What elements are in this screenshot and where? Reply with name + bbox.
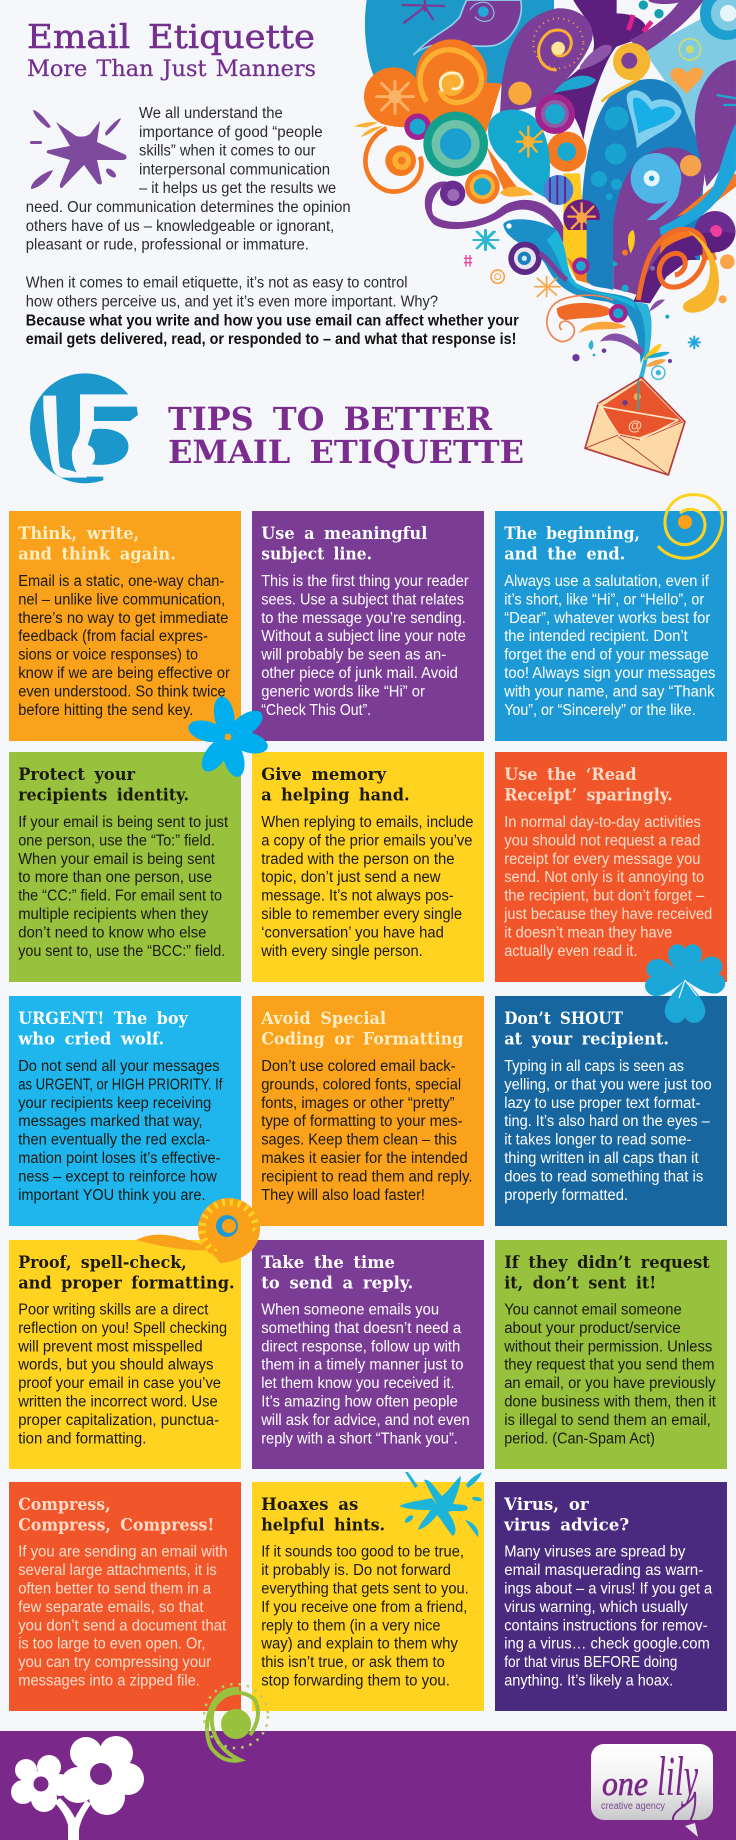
body: hoaxes: everything that gets sent to you. [261, 1580, 469, 1598]
tip card 7: urgent: who cried wolf. [17, 1029, 164, 1048]
body: hoaxes: this isn’t true, or ask them to [261, 1654, 445, 1671]
subtitle: More Than Just Manners [27, 57, 316, 82]
body: take the time: It’s amazing how often people [261, 1394, 458, 1410]
title: Email Etiquette [27, 17, 315, 56]
logo: one lily creative agency: creative agency [601, 1801, 665, 1812]
tip card 6: read receipt: Receipt’ sparingly. [504, 785, 673, 804]
body: compress: messages into a zipped file. [18, 1672, 200, 1690]
body: think, write [18, 573, 230, 719]
icon: purple splat [30, 110, 126, 189]
tip card 8: special formatting [252, 996, 484, 1226]
tip card 1: think, write: and think again. [18, 544, 176, 563]
tip card 9: don't shout [495, 996, 727, 1226]
body: don't shout: does to read something that is [504, 1168, 704, 1185]
body: think, write: nel – unlike live communication, [18, 591, 225, 608]
intro text: need. Our communication determines the opinion [26, 199, 351, 216]
intro text: email gets delivered, read, or responded to – and what that response is! [26, 331, 516, 348]
intro text: pleasant or rude, professional or immature. [26, 237, 309, 254]
body: proof: tion and formatting. [18, 1430, 146, 1447]
body: don't sent it: period. (Can-Spam Act) [504, 1430, 655, 1447]
body: recipients identity: multiple recipients when they [18, 906, 209, 923]
intro text: importance of good “people [139, 124, 323, 141]
icon: white tree with two flowers [11, 1736, 144, 1840]
body: urgent: as URGENT, or HIGH PRIORITY. If [18, 1076, 223, 1093]
tip card 10: proof: and proper formatting. [18, 1273, 235, 1292]
tip card 12: don't sent it: If they didn’t request [504, 1253, 710, 1272]
body: proof: proof your email in case you’ve [18, 1375, 221, 1392]
tip card 1: think, write [9, 511, 241, 741]
body: memory: sible to remember every single [261, 906, 462, 923]
body: proof: Poor writing skills are a direct [18, 1302, 209, 1318]
logo: one lily creative agency: one [602, 1766, 648, 1803]
body: don't sent it: an email, or you have previously [504, 1375, 716, 1392]
body: beginning and end: with your name, and say “Thank [503, 683, 715, 700]
body: take the time: reply with a short “Thank you”. [261, 1430, 458, 1447]
body: special formatting: makes it easier for the intended [261, 1150, 468, 1167]
body: urgent: mation point loses it’s effective- [18, 1150, 221, 1167]
tip card 15: virus: Virus, or [503, 1495, 589, 1514]
body: special formatting: grounds, colored fonts, special [261, 1076, 461, 1093]
illustration: colourful swirl burst [354, 0, 736, 475]
body: read receipt: actually even read it. [504, 943, 638, 960]
body: hoaxes: it probably is. Do not forward [261, 1562, 451, 1579]
body: recipients identity: If your email is being sent to just [18, 814, 229, 831]
tip card 4: recipients identity: recipients identity. [18, 785, 189, 804]
tip card 10: proof [9, 1240, 241, 1469]
body: don't shout [504, 1058, 712, 1204]
intro text [26, 105, 519, 348]
body: take the time [260, 1302, 470, 1447]
body: memory: traded with the person on the [261, 851, 455, 868]
tip card 6: read receipt [495, 752, 727, 982]
body: read receipt: receipt for every message you [504, 851, 700, 868]
icon: green spiral [204, 1684, 268, 1761]
body: subject line: This is the first thing your reader [261, 573, 469, 590]
body: read receipt: In normal day-to-day activities [504, 814, 701, 831]
body: special formatting: They will also load faster! [261, 1187, 425, 1204]
body: subject line: Without a subject line your note [261, 628, 466, 645]
body: memory: message. It’s not always pos- [261, 888, 454, 905]
body: memory: ‘conversation’ you have had [261, 924, 444, 941]
tip card 9: don't shout: Don’t SHOUT [504, 1009, 624, 1028]
body: compress: several large attachments, it is [18, 1562, 217, 1579]
body: recipients identity: to more than one person, use [18, 869, 212, 886]
body: don't sent it: You cannot email someone [504, 1302, 682, 1318]
body: think, write: even understood. So think twice [18, 683, 226, 700]
body: don't shout: thing written in all caps than it [504, 1150, 699, 1167]
intro text: how others perceive us, and yet it’s even more important. Why? [26, 294, 438, 310]
body: take the time: will ask for advice, and not even [260, 1412, 470, 1429]
body: beginning and end: Always use a salutation, even if [504, 573, 710, 590]
body: read receipt: send. Not only is it annoying to [504, 869, 704, 886]
body: virus: email masquerading as warn- [504, 1562, 703, 1579]
heading: 15 tips: TIPS TO BETTER [168, 400, 492, 438]
tip card 3: beginning and end: The beginning, [504, 524, 640, 543]
body: take the time: them in a timely manner just to [261, 1357, 464, 1374]
body: think, write: feedback (from facial expres- [18, 628, 208, 645]
body: memory [260, 814, 473, 960]
heading: 15 tips: EMAIL ETIQUETTE [168, 433, 524, 471]
body: virus [504, 1544, 713, 1690]
tip card 14: hoaxes: Hoaxes as [261, 1495, 358, 1514]
body: virus: Many viruses are spread by [504, 1544, 686, 1561]
body: special formatting: sages. Keep them clean – this [261, 1132, 457, 1149]
tip card 7: urgent: URGENT! The boy [18, 1009, 188, 1028]
body: don't shout: lazy to use proper text format- [504, 1095, 700, 1112]
body: beginning and end: too! Always sign your messages [504, 665, 716, 682]
tip card 12: don't sent it: it, don’t sent it! [504, 1273, 656, 1292]
tip card 7: urgent [9, 996, 241, 1226]
tip card 14: hoaxes: helpful hints. [261, 1515, 385, 1534]
tip card 13: compress: Compress, [18, 1495, 111, 1514]
body: think, write: Email is a static, one-way chan- [18, 573, 224, 590]
body: read receipt [503, 814, 712, 960]
body: urgent [18, 1058, 223, 1204]
body: urgent: important YOU think you are. [18, 1187, 206, 1204]
body: hoaxes: way) and explain to them why [260, 1636, 458, 1653]
tip card 15: virus: virus advice? [503, 1515, 629, 1534]
body: virus: contains instructions for remov- [504, 1617, 708, 1634]
body: urgent: then eventually the red excla- [18, 1132, 210, 1149]
body: compress: If you are sending an email with [18, 1544, 228, 1561]
body: don't shout: yelling, or that you were just too [504, 1076, 712, 1093]
icon: yellow spiral [658, 495, 722, 558]
tip card 10: proof: Proof, spell-check, [18, 1253, 187, 1272]
body: think, write: know if we are being effective or [18, 665, 230, 682]
body: hoaxes: If it sounds too good to be true, [261, 1544, 464, 1561]
tip card 4: recipients identity: Protect your [18, 765, 135, 784]
tip card 9: don't shout: at your recipient. [504, 1029, 669, 1048]
body: memory: When replying to emails, include [261, 814, 473, 831]
body: virus: ing a virus… check google.com [504, 1636, 710, 1653]
body: don't sent it: is illegal to send them an email, [504, 1412, 711, 1429]
body: virus: anything. It’s likely a hoax. [504, 1672, 673, 1690]
icon: orange shell spiral [136, 1198, 260, 1263]
body: think, write: before hitting the send key. [18, 702, 193, 719]
body: urgent: ness – except to reinforce how [18, 1168, 218, 1185]
body: proof: written the incorrect word. Use [17, 1394, 218, 1410]
body: hoaxes: If you receive one from a friend, [261, 1599, 467, 1616]
body: don't shout: Typing in all caps is seen as [504, 1058, 684, 1075]
tip card 3: beginning and end [495, 511, 727, 741]
body: proof: will prevent most misspelled [17, 1338, 203, 1355]
body: read receipt: it doesn’t mean they have [504, 924, 672, 941]
body: beginning and end [503, 573, 716, 719]
tip card 15: virus [495, 1482, 727, 1711]
body: subject line: to the message you’re sending. [261, 610, 466, 627]
heading: 15 tips [168, 400, 524, 471]
body: don't sent it: about your product/service [504, 1320, 681, 1337]
body: compress [18, 1544, 228, 1690]
intro text: skills” when it comes to our [139, 143, 316, 160]
body: special formatting [261, 1058, 472, 1204]
body: memory: with every single person. [260, 943, 423, 960]
icon: open envelope with @: @ [628, 419, 642, 435]
body: take the time: let them know you received it. [261, 1375, 455, 1392]
body: beginning and end: forget the end of your message [504, 647, 709, 664]
body: think, write: sions or voice responses) to [18, 647, 198, 664]
intro text: We all understand the [139, 105, 283, 122]
icon: blue asterisk flower [186, 695, 270, 779]
body: virus: ings about – a virus! If you get a [504, 1580, 713, 1598]
body: beginning and end: the intended recipient. Don’t [504, 628, 688, 645]
body: don't sent it: they request that you send them [504, 1357, 715, 1374]
body: subject line [260, 573, 469, 719]
body: think, write: there’s no way to get immediate [18, 610, 229, 627]
tip card 8: special formatting: Coding or Formatting [261, 1029, 464, 1048]
tip card 5: memory: Give memory [261, 765, 387, 784]
body: read receipt: the recipient, but don’t forget – [504, 888, 705, 905]
body: compress: few separate emails, so that [18, 1599, 204, 1616]
tip card 14: hoaxes [252, 1482, 484, 1711]
tip card 13: compress [9, 1482, 241, 1711]
body: don't sent it: done business with them, then it [504, 1394, 717, 1410]
body: special formatting: type of formatting to your mes- [261, 1113, 463, 1130]
tip card 5: memory [252, 752, 484, 982]
body: recipients identity: one person, use the “To:” field. [18, 832, 215, 849]
body: proof [17, 1302, 227, 1447]
body: urgent: Do not send all your messages [18, 1058, 220, 1075]
footer band [0, 1731, 736, 1840]
body: don't sent it: without their permission. Unless [503, 1338, 712, 1355]
body: urgent: messages marked that way, [18, 1113, 203, 1130]
body: recipients identity: you sent to, use the “BCC:” field. [18, 943, 225, 960]
body: subject line: “Check This Out”. [261, 702, 371, 719]
body: hoaxes [260, 1544, 469, 1690]
body: special formatting: recipient to read them and reply. [261, 1168, 473, 1185]
logo: one lily creative agency [591, 1744, 713, 1837]
badge: number 15 [30, 373, 145, 483]
body: beginning and end: You”, or “Sincerely” or the like. [504, 702, 696, 719]
icon: blue clover [644, 944, 727, 1023]
body: take the time: something that doesn’t need a [261, 1320, 462, 1337]
body: compress: you don’t send a document that [18, 1617, 227, 1634]
body: subject line: other piece of junk mail. Avoid [261, 665, 458, 682]
body: memory: topic, don’t just send a new [261, 869, 441, 886]
icon: cyan splash [399, 1472, 482, 1537]
intro text: others have of us – knowledgeable or ignorant, [26, 218, 334, 235]
body: subject line: will probably be seen as an- [260, 647, 446, 664]
tip card 2: subject line [252, 511, 484, 741]
body: recipients identity: the “CC:” field. For email sent to [18, 888, 222, 905]
body: special formatting: fonts, images or other “pretty” [261, 1095, 455, 1112]
body: proof: words, but you should always [17, 1357, 214, 1374]
body: recipients identity [18, 814, 229, 960]
body: don't shout: it takes longer to read some- [504, 1132, 692, 1149]
tip card 11: take the time: to send a reply. [261, 1273, 413, 1292]
tip card 12: don't sent it [495, 1240, 727, 1469]
body: urgent: your recipients keep receiving [18, 1095, 211, 1112]
icon: open envelope with @ [585, 377, 685, 475]
body: subject line: generic words like “Hi” or [261, 683, 425, 700]
tip card 2: subject line: Use a meaningful [261, 524, 427, 543]
tip card 8: special formatting: Avoid Special [260, 1009, 386, 1028]
tip card 1: think, write: Think, write, [18, 524, 139, 543]
body: virus: for that virus BEFORE doing [504, 1654, 677, 1671]
tip card 3: beginning and end: and the end. [504, 544, 625, 563]
body: hoaxes: stop forwarding them to you. [261, 1672, 450, 1690]
body: beginning and end: “Dear”, whatever works best for [504, 610, 710, 627]
body: proof: reflection on you! Spell checking [18, 1320, 227, 1337]
tip card 13: compress: Compress, Compress! [18, 1515, 214, 1534]
title [27, 17, 316, 82]
body: memory: a copy of the prior emails you’ve [261, 832, 473, 849]
body: don't shout: ting. It’s also hard on the eyes – [504, 1113, 710, 1130]
tip card 5: memory: a helping hand. [261, 785, 410, 804]
body: don't shout: properly formatted. [504, 1187, 628, 1204]
intro text: When it comes to email etiquette, it’s not as easy to control [26, 275, 408, 292]
tip card 2: subject line: subject line. [261, 544, 372, 563]
body: proof: proper capitalization, punctua- [18, 1412, 219, 1429]
intro text: – it helps us get the results we [139, 180, 336, 197]
body: compress: is too large to even open. Or, [18, 1636, 206, 1653]
intro text: interpersonal communication [139, 161, 330, 178]
body: compress: often better to send them in a [18, 1580, 212, 1598]
body: beginning and end: it’s short, like “Hi”, or “Hello”, or [504, 591, 704, 608]
body: read receipt: just because they have received [503, 906, 712, 923]
body: recipients identity: When your email is being sent [18, 851, 216, 868]
body: special formatting: Don’t use colored email back- [261, 1058, 456, 1075]
body: recipients identity: don’t need to know who else [18, 924, 207, 941]
body: read receipt: you should not request a read [504, 832, 700, 849]
body: don't sent it [503, 1302, 717, 1447]
intro text: Because what you write and how you use email can affect whether your [26, 312, 519, 329]
logo: one lily creative agency: lily [657, 1746, 698, 1808]
body: compress: you can try compressing your [18, 1654, 211, 1671]
tip card 6: read receipt: Use the ‘Read [504, 765, 637, 784]
tip card 11: take the time [252, 1240, 484, 1469]
body: virus: virus warning, which usually [504, 1599, 688, 1616]
tip card 11: take the time: Take the time [261, 1253, 395, 1272]
body: take the time: When someone emails you [261, 1302, 439, 1318]
body: take the time: direct response, follow up with [261, 1338, 460, 1355]
body: hoaxes: reply to them (in a very nice [261, 1617, 441, 1634]
body: subject line: sees. Use a subject that relates [261, 591, 464, 608]
tip card 4: recipients identity [9, 752, 241, 982]
